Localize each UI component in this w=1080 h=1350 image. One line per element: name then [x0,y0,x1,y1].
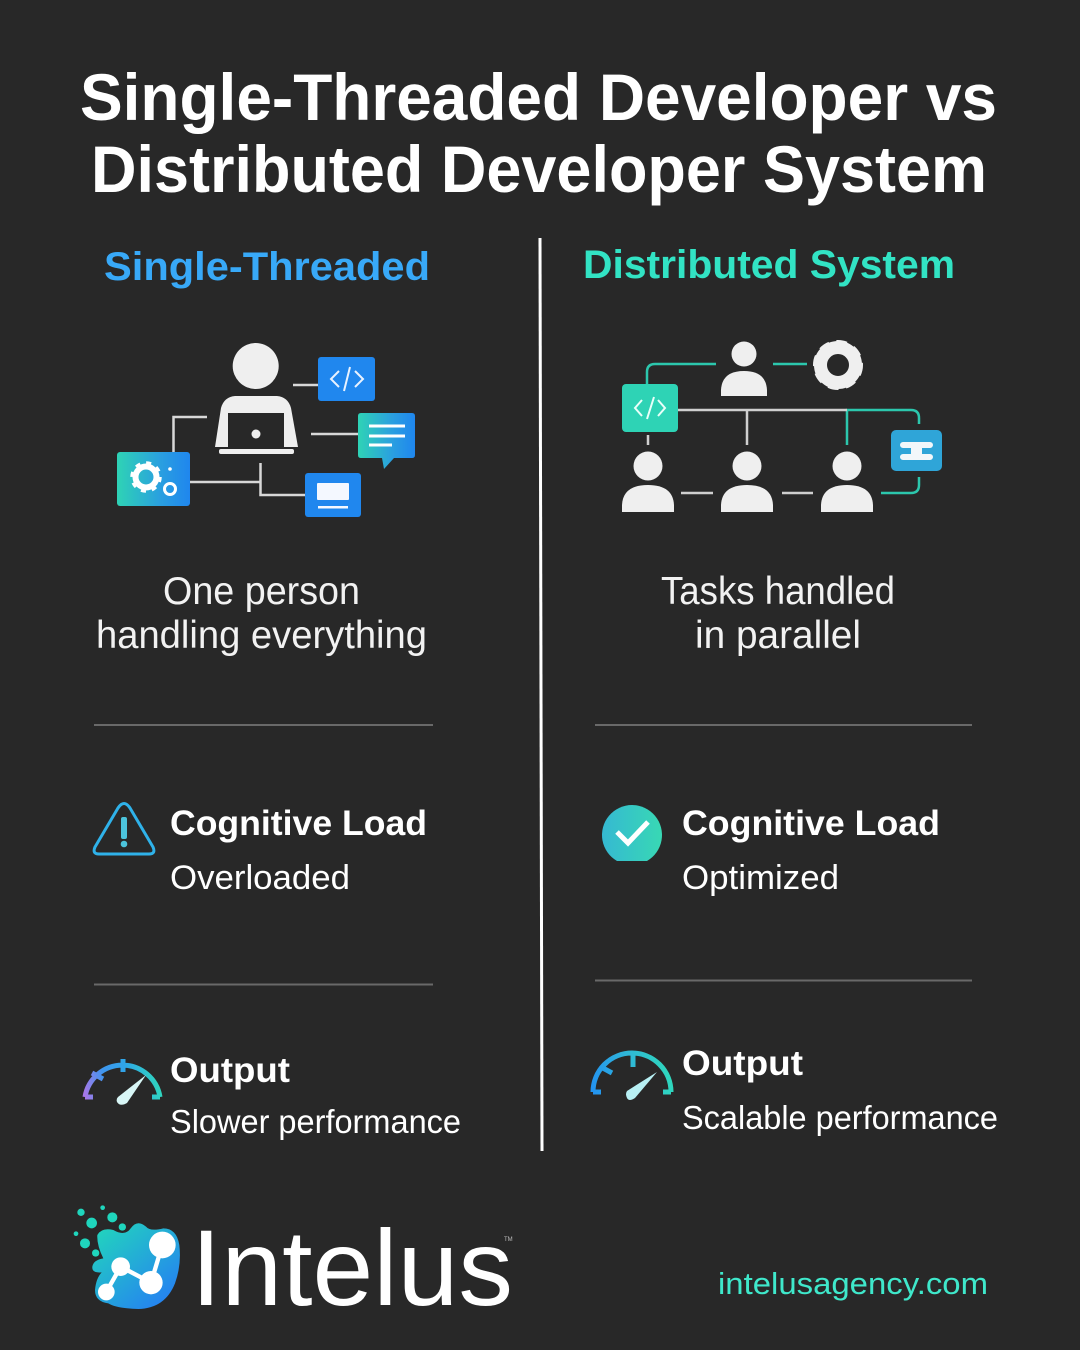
text: tasks handled in parallel: in parallel [695,614,861,657]
icon: gauge fast [593,1053,671,1100]
icon: check circle [602,805,662,861]
metric: cognitive load overloaded [170,804,427,897]
website url: intelusagency.com [718,1266,988,1301]
metric: output scalable performance: Scalable performance [682,1099,998,1136]
metric: cognitive load overloaded: Cognitive Load [170,804,427,843]
metric: cognitive load overloaded: Overloaded [170,859,350,897]
metric: output slower performance: Slower performance [170,1103,461,1140]
panel: distributed system [583,243,998,1136]
title: Single-Threaded Developer vs [80,60,997,134]
illustration: distributed team [622,342,942,512]
title: Distributed Developer System [91,132,987,206]
metric: output slower performance: Output [170,1051,290,1090]
text: one person handling everything [96,570,427,657]
metric: output scalable performance [682,1044,998,1136]
illustration: single developer [117,343,415,517]
trademark: TM [504,1237,513,1243]
metric: cognitive load optimized [682,804,940,897]
text: tasks handled in parallel: Tasks handled [661,570,895,613]
text: one person handling everything: handling everything [96,614,427,657]
text: tasks handled in parallel [661,570,895,657]
metric: output scalable performance: Output [682,1044,803,1083]
text: one person handling everything: One person [163,570,360,613]
title [80,60,997,206]
metric: cognitive load optimized: Optimized [682,859,839,897]
logo wordmark: Intelus [191,1207,513,1328]
heading: distributed system: Distributed System [583,243,955,287]
heading: single-threaded: Single-Threaded [104,245,430,289]
center divider [540,238,542,1151]
metric: output slower performance [170,1051,461,1140]
icon: warning triangle [94,804,154,854]
metric: cognitive load optimized: Cognitive Load [682,804,940,843]
icon: gauge slow [85,1059,160,1105]
panel: single-threaded [85,245,461,1140]
logo mark [74,1205,180,1309]
logo: Intelus [74,1205,513,1328]
